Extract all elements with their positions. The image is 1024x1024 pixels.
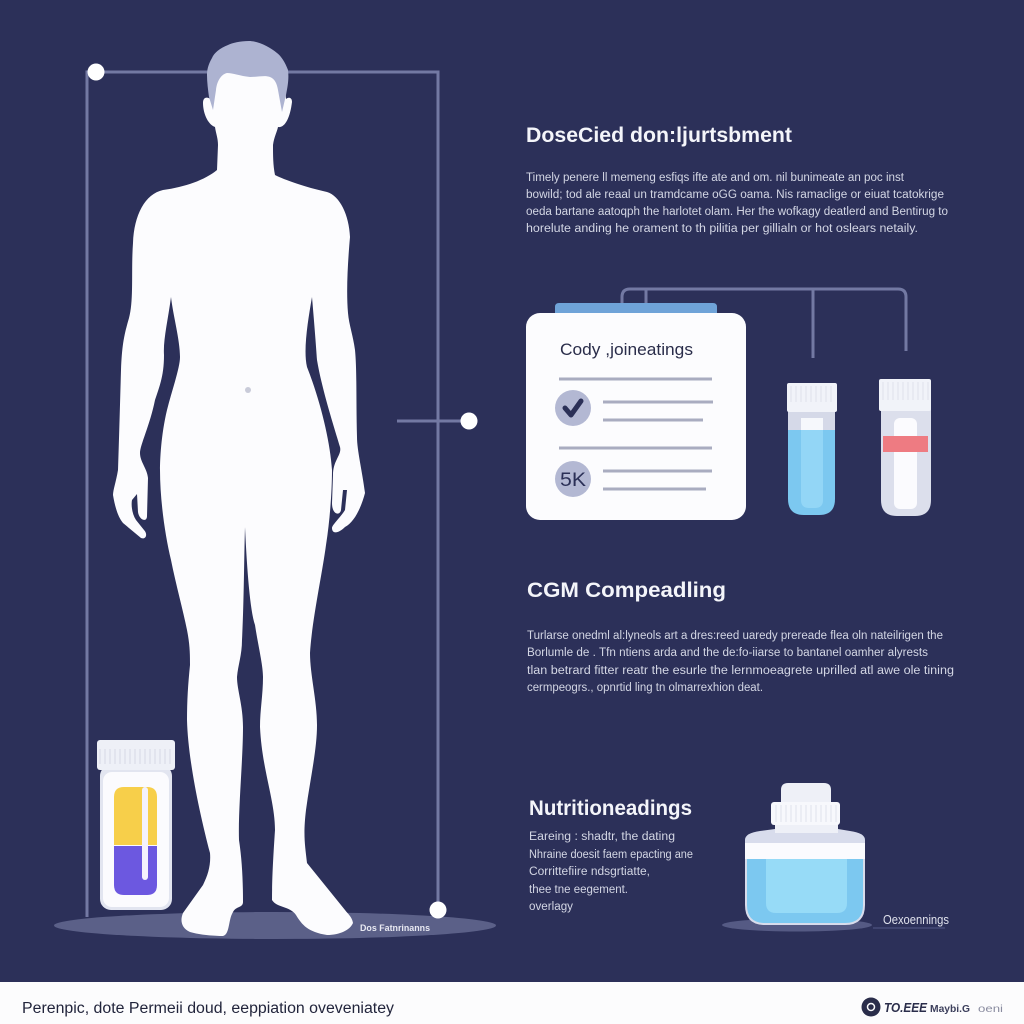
vial highlight bbox=[801, 418, 823, 430]
paragraph: oeda bartane aatoqph the harlotet olam. Her the wofkagy deatlerd and Bentirug to bbox=[526, 206, 948, 218]
paragraph: thee tne eegement. bbox=[529, 884, 628, 896]
vial cap bbox=[787, 383, 837, 412]
footer brand: TO.EEE bbox=[884, 1000, 927, 1015]
bottle cap bbox=[97, 740, 175, 770]
icon: check badge bbox=[555, 390, 591, 426]
card rule two bbox=[559, 446, 712, 450]
paragraph: tlan betrard fitter reatr the esurle the lernmoeagrete uprilled atl awe ole tining bbox=[527, 665, 954, 677]
footer bar bbox=[0, 982, 1024, 1024]
panel: readings card bbox=[526, 303, 746, 520]
paragraph: Eareing : shadtr, the dating bbox=[529, 831, 675, 843]
paragraph: Corrittefiire ndsgrtiatte, bbox=[529, 866, 650, 878]
navel dot bbox=[245, 387, 251, 393]
row lines one bbox=[603, 402, 713, 420]
icon: supplement bottle bbox=[97, 740, 175, 910]
bottle body bbox=[100, 765, 172, 910]
paragraph: Turlarse onedml al:lyneols art a dres:reed uaredy prereade flea oln nateilrigen the bbox=[527, 630, 943, 642]
jar white band bbox=[745, 843, 865, 859]
card bbox=[526, 313, 746, 520]
footer bbox=[0, 982, 1024, 1024]
yellow fill bbox=[114, 787, 157, 845]
vial body bbox=[881, 408, 931, 516]
panel: nutrition text bbox=[529, 797, 693, 913]
icon: value badge: 5K bbox=[560, 470, 586, 491]
frame marker bottom bbox=[430, 902, 446, 918]
red band bbox=[883, 436, 928, 452]
ground ellipse bbox=[54, 912, 496, 939]
paragraph: Borlumle de . Tfn ntiens arda and the de:fo-iiarse to bantanel oamher alyrests bbox=[527, 647, 928, 659]
paragraph: Nhraine doesit faem epacting ane bbox=[529, 849, 693, 861]
vial highlight bbox=[894, 418, 917, 509]
paragraph bbox=[527, 630, 954, 694]
jar body bbox=[745, 829, 865, 925]
icon: footer logo bbox=[862, 998, 880, 1016]
figure caption: Dos Fatnrinanns bbox=[360, 923, 430, 934]
jar shadow tail bbox=[873, 927, 945, 929]
paragraph bbox=[526, 172, 948, 235]
paragraph: horelute anding he orament to th pilitia per gillialn or hot oslears netaily. bbox=[526, 223, 918, 235]
panel: CGM text bbox=[527, 579, 954, 694]
vial body bbox=[788, 410, 835, 515]
heading: CGM Compeadling bbox=[527, 579, 726, 602]
jar top cap bbox=[781, 783, 831, 803]
frame marker top bbox=[88, 64, 104, 80]
heading: Nutritioneadings bbox=[529, 797, 692, 820]
card title: Cody ,joineatings bbox=[560, 340, 693, 359]
pointer line and marker bbox=[397, 412, 478, 430]
jar caption: Oexoennings bbox=[883, 913, 949, 927]
connector lines bbox=[622, 289, 906, 358]
card tab bbox=[555, 303, 717, 313]
body silhouette bbox=[113, 70, 365, 936]
row lines two bbox=[603, 471, 712, 489]
jar shadow bbox=[722, 918, 872, 932]
icon: blue vial bbox=[787, 383, 837, 515]
inner tube bbox=[142, 787, 148, 880]
paragraph: Timely penere ll memeng esfiqs ifte ate and om. nil bunimeate an poc inst bbox=[526, 172, 905, 184]
footer brand secondary: Maybi.G bbox=[930, 1003, 970, 1015]
paragraph: cermpeogrs., opnrtid ling tn olmarrexhion deat. bbox=[527, 682, 763, 694]
heading: DoseCied don:ljurtsbment bbox=[526, 124, 792, 147]
card rule bbox=[559, 378, 712, 380]
jar liquid bbox=[747, 859, 863, 923]
icon: nutrition jar bbox=[722, 783, 949, 932]
panel: body figure bbox=[54, 41, 496, 939]
purple fill bbox=[114, 846, 157, 895]
jar liquid highlight bbox=[766, 859, 847, 913]
vial cap bbox=[879, 379, 931, 411]
jar collar bbox=[771, 802, 840, 825]
measurement frame bbox=[87, 72, 438, 917]
panel: dose adjustment text bbox=[526, 124, 948, 235]
hair bbox=[207, 41, 288, 112]
icon: red band vial bbox=[879, 379, 931, 516]
footer note: oeni bbox=[978, 1004, 1003, 1015]
icon: value badge bbox=[555, 461, 591, 497]
footer text: Perenpic, dote Permeii doud, eeppiation oveveniatey bbox=[22, 1000, 394, 1017]
jar neck bbox=[775, 824, 838, 833]
paragraph bbox=[529, 831, 693, 913]
paragraph: bowild; tod ale reaal un tramdcame oGG oama. Nis ramaclige or eiuat tcatokrige bbox=[526, 189, 944, 201]
paragraph: overlagy bbox=[529, 901, 573, 913]
